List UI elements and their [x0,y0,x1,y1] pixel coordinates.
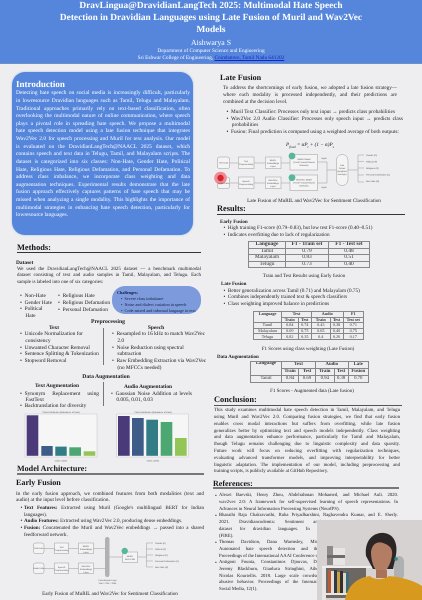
bullet markers: • [20,525,22,531]
conclusion text: training scripts, is publicly available at GitHub Repository. [214,469,328,474]
conclusion text: This study examines multimodal hate speech detection in Tamil, Malayalam, and Telugu [214,408,400,413]
diagram: late fusion: MuRIL Model [298,158,311,161]
presenter video [317,520,422,600]
preprocessing text list: • Unicode Normalization for [20,331,83,337]
category list 1: • Non-Hate [20,293,46,299]
conclusion text: linguistic adaptation. The implementation of our model, including preprocessing and [214,463,400,468]
audio augmentation list: Addition [152,391,171,397]
panel: introduction [12,72,193,235]
table: augmented data scores: Test [303,369,311,374]
table: augmented data scores: Tamil [260,376,272,381]
table: augmented data scores: 0.38 [337,376,345,381]
dataset text [17,266,201,285]
early fusion bullets: Audio Features: Extracted using Wav2Vec 2.0, producing dense embeddings. [24,518,182,524]
conclusion text [214,408,400,474]
heading: introduction: Introduction [16,79,65,89]
diagram: late fusion: Personal Defamation (C) [366,174,390,176]
reference bullets: • [215,493,217,499]
diagram: early fusion: Dim = 768 + 1536 [99,582,117,585]
late fusion bullets: → [366,116,371,122]
references list: dataset for dravidian languages. In Forum for Information Retrieval [219,527,398,532]
preprocessing text list [20,331,99,364]
references list: Social Media, 12(1). [219,587,258,592]
heading: methods: Methods: [17,243,51,252]
late fusion text [223,85,397,104]
diagram: late fusion: Political (P) [366,160,377,164]
late fusion text: combined at the decision level. [223,98,287,104]
bullet markers [20,505,22,531]
diagram: early fusion: Layer [83,571,89,574]
dataset text: dataset consisting of text and audio samples in Tamil, Malayalam, and Telugu. Each [17,273,201,278]
category list 1: • Gender Hate [20,300,52,306]
introduction text: Hate, Religious Hate, Religious Defamation, and Personal Defamation. To [16,167,190,173]
early fusion bullets: feedforward network. [24,532,68,538]
preprocessing speech list: • Noise Reduction using spectral [112,345,184,351]
late fusion bullets: 2.0 [253,116,260,122]
introduction text: fusion approach effectively captures patterns of hate speech that may be [16,189,190,195]
diagram: early fusion: Text Data [34,547,44,550]
early fusion results bullets: • Indicates overfitting due to lack of regularization [224,232,330,238]
diagram: late fusion: Audio Data [218,182,230,185]
preprocessing speech list: • Raw Embedding Extraction via Wav2Vec [112,358,206,364]
speech column heading: Speech [148,324,164,330]
callout: challenges: • Code-mixed and informal language in text [121,308,196,313]
introduction text: missed when analyzing a single modality. This highlights the importance of [16,197,190,203]
diagram: late fusion: Layer [270,165,276,168]
late fusion text: To address the shortcomings of early fusion, we adopted a late fusion strategy— [223,85,397,91]
introduction text: lowresource languages. [16,212,68,218]
preprocessing heading: Preprocessing [91,318,125,324]
references list: Bharathi Raja Chakravarthi, Ruba Priyadharshini, Raghavendra Kumar, and E. Sherly. [219,513,398,518]
conclusion text: and data augmentation enhance performance, particularly for Tamil and Malayalam, [214,435,400,440]
diagram: late fusion: Network) [300,164,309,167]
heading: late fusion: Late Fusion [220,73,261,82]
diagram: late fusion: logits [321,186,327,189]
early fusion results subheading: Early Fusion [220,220,248,224]
late fusion bullets: • Muril Text Classifier: Processes only text input → predicts class probabilities [226,109,395,115]
dataset subheading: Dataset [16,260,33,266]
affiliation: Department of Computer Science and Engineering [157,48,265,54]
diagram: late fusion: Gender (G) [366,154,377,157]
references list: Nicolas Kourtellis. 2018. Large scale crowdsourcing and characterization of twitter [219,574,398,579]
reference bullets: • [215,513,217,519]
table: augmented data scores: Audio [326,362,338,367]
diagram: late fusion: Non-Hate (N) [366,180,379,183]
late fusion bullets [226,109,403,135]
late fusion bullets: probabilities [232,122,258,128]
diagram: early fusion: Personal Defamation (C) [155,560,179,563]
early fusion text [16,490,204,503]
introduction text: in lowresource Dravidian languages such as Tamil, Telugu and Malayalam. [16,98,190,104]
early fusion text: In the early fusion approach, we combined features from both modalities (text and [16,490,204,496]
diagram: early fusion: Religious (R) [155,554,168,557]
references list: Alexei Baevski, Henry Zhou, Abdelrahman Mohamed, and Michael Auli. 2020. [219,493,398,498]
bar chart: text class distribution: Class Labels [55,460,68,462]
late fusion bullets: only [325,116,334,122]
introduction text: Traditional approaches primarily rely on text-based classification, often [16,106,190,112]
diagram: late fusion: (Feed Forward Neural [293,182,315,184]
diagram: early fusion: Embeddings [80,568,93,571]
references list: Jeremy Blackburn, Gianluca Stringhini, Athena Vakali, Michael Sirivianos, and [219,567,398,572]
late fusion bullets: speech [336,116,351,122]
early fusion results bullets: • High training F1-score (0.79–0.83), but low test F1-score (0.40–0.51) [224,225,372,231]
reference bullets: • [215,540,217,546]
diagram: early fusion: Preprocessing [55,549,69,552]
affiliation: Sri Eshwar College of Engineering, Coimbatore, Tamil Nadu 641202 [138,54,284,60]
preprocessing text list: consistency [25,338,51,344]
title: Detection in Dravidian Languages using Late Fusion of Muril and Wav2Vec [60,13,362,23]
audio augmentation list: Noise [137,391,150,397]
diagram: late fusion: Text Data [219,162,229,164]
late fusion results bullets: • Better generalization across Tamil (0.71) and Malayalam (0.75) [224,288,360,294]
diagram: early fusion: Speech [58,566,66,569]
diagram: late fusion: Network) [300,184,309,188]
diagram: late fusion: Speech [242,180,250,183]
bar chart: text class distribution: Class Distribution (Rebalance of Data) [42,411,80,414]
late fusion results bullets: • Combines independently trained text & speech classifiers [224,294,347,300]
diagram: late fusion: (Feed Forward Neural [293,161,315,164]
category list 1: • Political [20,306,43,312]
text augmentation list: • Synonym [20,390,45,396]
bar chart: text class distribution [24,411,98,462]
late fusion bullets: • Wav2Vec [226,116,251,122]
conclusion text: though Telugu remains challenging due to linguistic complexity and data sparsity. [214,442,400,447]
preprocessing speech list: subtraction [117,351,141,357]
diagram: early fusion: Layer [83,551,89,554]
introduction text: Wav2Vec 2.0 for speech processing and Muril for text analysis. Our model [16,136,190,142]
introduction text: is evaluated on the DravidianLangTech@NAACL 2025 dataset, which [16,144,190,150]
introduction text: augmentation techniques. Experimental results demonstrate that the late [16,182,190,188]
late fusion bullets: class [393,116,403,122]
bar chart: audio class distribution: Class Labels [147,460,160,462]
author: Aishwarya S [191,38,231,47]
preprocessing text list: • Stopword Removal [20,358,66,364]
late fusion results subheading: Late Fusion [221,282,246,286]
callout: challenges [112,286,201,314]
preprocessing text list: • Sentence Splitting & Tokenization [20,351,99,357]
introduction text: address class imbalance, we incorporate class weighting and data [16,174,190,180]
references list: 2021. Dravidiancodemix: Sentiment analysis and offensive language [219,520,398,525]
category list 1: Hate [25,313,36,319]
callout: challenges: • Noise and dialect variation in speech [121,302,186,307]
heading: model architecture: Model Architecture: [17,464,87,473]
heading: references: References: [213,478,253,488]
diagram: late fusion: Wav2Vec Model [296,178,312,182]
title: DravLingua@DravidianLangTech 2025: Multimodal Hate Speech [79,1,343,11]
diagram: late fusion: Layer [270,185,276,188]
diagram: early fusion: Audio Data [33,567,45,570]
early fusion results bullets [224,225,372,238]
reference bullets: • [215,560,217,566]
early fusion bullets: Text Features: Extracted using Muril (Google's multilingual BERT for Indian [24,505,204,511]
early fusion text: audio) at the input level before classification. [16,497,110,503]
late fusion bullets: predicts [374,116,390,122]
references list: Advances in Neural Information Processing Systems (NeurIPS). [219,507,340,512]
references list [219,492,398,592]
category list 2: • Religious Defamation [58,300,110,306]
text augmentation heading: Text Augmentation [35,383,79,389]
diagram: late fusion [214,152,390,191]
late fusion bullets: • Fusion: Final prediction is computed using a weighted average of both outputs: [226,129,399,135]
text augmentation list: Replacement [52,390,80,396]
category list 2 [58,293,110,313]
introduction text: overlooking the multimodal nature of online communication, where speech [16,113,190,119]
references list: Antigoni Founta, Constantinos Djouvas, Despoina Chatzakou, Ilias Leontiadis, [219,560,398,565]
diagram: late fusion: Embeddings [267,182,280,185]
bar chart: audio class distribution [116,411,188,462]
diagram: late fusion: Text [244,160,248,163]
references list: (FIRE). [219,534,233,539]
late fusion results bullets [224,288,360,307]
title: Models [196,25,226,35]
heading: conclusion: Conclusion: [214,395,257,404]
reference bullets [215,493,217,566]
text augmentation list: using [87,390,99,396]
diagram: early fusion: MuRIL [127,555,134,558]
late fusion results bullets: • Class weighting improved balance in predictions [224,301,329,307]
text augmentation list: • Backtranslation for diversity [20,403,86,409]
diagram: late fusion: logits [321,157,327,160]
conclusion text: Future work will focus on reducing overfitting with regularization techniques, [214,449,400,454]
caption: early fusion table: Train and Test Results using Early fusion [263,274,345,278]
category list 1 [20,293,52,319]
table: augmented data scores: 0.94 [321,376,329,381]
diagram: late fusion: (weighted [337,170,348,173]
table: augmented data scores: Train [319,369,330,374]
preprocessing text list: • Unwanted Character Removal [20,345,90,351]
diagram: early fusion: Bert+FNN [125,558,135,561]
callout: challenges: • Severe class imbalance [121,296,163,301]
preprocessing speech list: 2.0 [117,338,124,344]
bar chart: audio class distribution: Class Distribution (Rebalance of Data) [134,411,172,414]
audio augmentation heading: Audio Augmentation [124,384,172,390]
diagram: early fusion: Gender (0) [155,542,166,545]
bullet markers: • [20,505,22,511]
audio augmentation list: levels [179,391,192,397]
audio augmentation list: at [173,391,177,397]
references list: Automated hate speech detection and the problem of offensive language. [219,547,398,552]
introduction text: Detecting hate speech on social media is increasingly difficult, particularly [16,90,190,96]
late fusion bullets: Audio [262,116,276,122]
diagram: late fusion: Wav2Vec [268,179,278,182]
conclusion text: using Muril and Wav2Vec 2.0. Comparing fusion strategies, we find that early fusion [214,415,400,420]
preprocessing speech list: (no MFCCs needed) [117,365,161,371]
table: augmented data scores: 0.69 [303,376,311,381]
late fusion bullets: input [353,116,364,122]
caption: late fusion table: F1 Scores using class weighting (Late Fusion) [262,346,354,352]
caption: early fusion figure: Early Fusion of MuRIL and Wav2Vec for Sentiment Classification [42,590,178,596]
data augmentation results subheading: Data Augmentation [217,354,259,360]
table: late fusion scores [253,311,364,340]
callout: challenges: Challenges: [117,290,138,295]
text column heading: Text [49,324,59,330]
diagram: early fusion: MuRIL [83,545,90,548]
text augmentation list: FastText [25,397,44,403]
table: augmented data scores: Train [284,369,296,374]
dataset text: We used the DravidianLangTech@NAACL 2025 dataset — a benchmark multimodal [17,266,201,272]
introduction text: multimodal strategies in enhancing hate speech detection, particularly for [16,205,190,211]
category list 2: • Religious Hate [58,293,95,299]
references list: Thomas Davidson, Dana Warmsley, Michael Macy, and Ingmar Weber. [219,540,398,545]
table: augmented data scores: Text [294,362,303,367]
heading: early fusion: Early Fusion [16,478,61,487]
bullet markers: • [20,518,22,524]
table: augmented data scores [250,361,369,383]
caption: late fusion figure: Late Fusion of MuRIL and Wav2Vec for Sentiment Classification [247,198,381,204]
preprocessing speech list [112,331,206,371]
references list: wav2vec 2.0: A framework for self-supervised learning of speech representations. In [219,500,398,505]
affiliation [138,48,284,61]
conclusion text: evaluating advanced transformer models, and improving interpretability for better [214,456,400,461]
data augmentation heading: Data Augmentation [82,374,130,380]
diagram: late fusion: Preprocessing [239,183,254,186]
introduction text: dataset is categorized into six classes: Non-Hate, Gender Hate, Political [16,159,190,165]
conclusion text: generalizes better by optimizing text and speech models independently. Class weighting [214,429,400,434]
diagram: late fusion: Preprocessing [239,163,254,166]
diagram: early fusion: Political (P) [155,548,166,551]
diagram: late fusion: Late [340,164,345,167]
diagram: late fusion: Embeddings [267,162,280,165]
diagram: late fusion: MuRIL [270,159,277,162]
table: augmented data scores: Test [337,369,345,374]
late fusion text: where each modality is processed independently, and their predictions are [223,92,397,98]
conclusion text: enables cross modal interactions but suffers from overfitting, while late fusion [214,422,400,427]
title [60,1,362,35]
table: augmented data scores: Fusion [351,369,365,374]
table: augmented data scores: Late [354,362,363,367]
diagram: early fusion: Text [59,546,64,549]
table: augmented data scores: 0.70 [354,376,362,381]
introduction text: plays a pivotal role in spreading hate speech. We propose a multimodal [16,121,190,127]
diagram: early fusion: Wav2Vec [81,565,91,568]
introduction text: hate speech detection model using a late fusion technique that integrates [16,128,190,134]
formula: Pfinal = αPt + (1 − α)Ps [286,142,334,149]
heading: results: Results: [217,204,246,213]
early fusion bullets: languages). [24,512,47,518]
diagram: late fusion: average) [338,173,347,176]
diagram: early fusion [33,537,179,585]
text augmentation list [20,390,99,409]
header banner [0,0,422,64]
diagram: early fusion: Preprocessing [55,569,69,572]
category list 2: • Personal Defamation [58,307,108,313]
table: early fusion scores [248,241,370,268]
diagram: late fusion: Religious (R) [366,167,379,170]
dataset text: sample is labeled into one of six categories: [17,280,103,285]
diagram: early fusion: Concatenate Layer [98,579,117,582]
late fusion bullets: Classifier: [278,116,300,122]
references list: Proceedings of the International AAAI Conference on Web and Social Media. [219,554,365,559]
audio augmentation list: • Gaussian [111,391,135,397]
references list: abusive behavior. Proceedings of the International AAAI Conference on Web and [219,580,398,585]
preprocessing speech list: • Resampled to 16 kHz to match Wav2Vec [112,331,205,337]
diagram: early fusion: Non-Hate (N) [155,566,168,569]
early fusion bullets [24,505,204,538]
late fusion bullets: Processes [302,116,322,122]
introduction text [16,90,190,218]
table: augmented data scores: 0.84 [286,376,294,381]
audio augmentation list [111,391,192,403]
audio augmentation list: 0.005, 0.01, 0.03 [116,397,153,403]
early fusion bullets: Fusion: Concatenated the Muril and Wav2Vec embeddings → passed into a shared [24,525,204,531]
caption: augmented data table: F1 Scores - Augmented data (Late fusion) [270,389,354,394]
introduction text: contains speech and text data in Telugu, Tamil, and Malayalam scripts. The [16,151,190,157]
diagram: late fusion: Fusion [339,167,346,170]
diagram: early fusion: Embeddings [80,548,93,551]
